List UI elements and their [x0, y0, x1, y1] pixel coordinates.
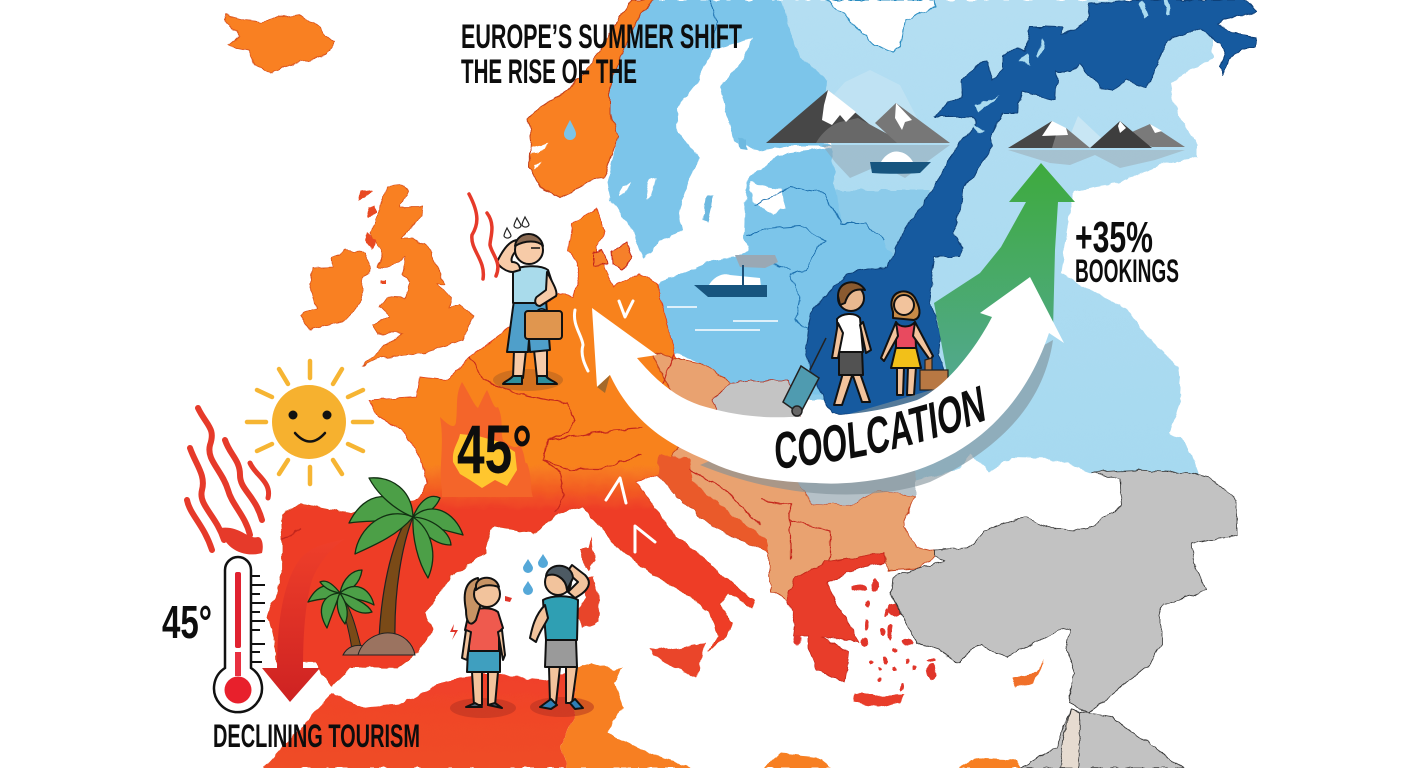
- stat: bookings up 35 percent: [1075, 213, 1179, 289]
- Ireland: [300, 250, 372, 330]
- arrow: white coolcation swoosh shadow: [700, 340, 1053, 495]
- mainland western Europe: [268, 208, 754, 687]
- Aegean islands: [793, 579, 937, 692]
- icon: flames over France: [440, 382, 533, 497]
- stat: bookings up 35 percent: +35%: [1075, 213, 1153, 262]
- Sinai, beige: [1060, 710, 1080, 768]
- map of Europe: [225, 0, 1257, 768]
- icon: mountains with lake, east: [1008, 116, 1185, 168]
- North Africa, orange: [560, 663, 693, 768]
- arctic island: [827, 0, 935, 52]
- blue country borders: [710, 0, 883, 330]
- man in white shirt: [832, 282, 871, 405]
- sweat drops: [523, 554, 548, 595]
- title: Europe's summer shift: [461, 18, 742, 91]
- Middle East, grey: [1021, 710, 1183, 768]
- Great Britain: [362, 185, 473, 367]
- North Africa, red: [263, 668, 577, 768]
- North Africa, eastern coast pieces: [763, 753, 1021, 768]
- icon: small ship: [870, 152, 931, 174]
- arrow: white coolcation swoosh: [592, 277, 1064, 484]
- icon: smiling sun: [247, 361, 372, 484]
- suitcase: blue: [783, 338, 826, 416]
- fjord inlets: [968, 0, 1171, 133]
- icon: water drop: [564, 120, 576, 140]
- title: Europe's summer shift: EUROPE’S SUMMER SHIFT: [461, 18, 742, 56]
- title: Europe's summer shift: THE RISE OF THE: [461, 53, 637, 91]
- icon: small palm tree: [308, 570, 374, 650]
- Greece: [786, 552, 885, 683]
- Hebrides islands: [358, 190, 386, 284]
- icon: large palm tree: [349, 478, 463, 640]
- grey-blue area under the arrow: [790, 470, 915, 505]
- stat: bookings up 35 percent: BOOKINGS: [1075, 253, 1179, 289]
- Iceland: [225, 14, 335, 72]
- icon: heat waves: [187, 408, 269, 554]
- Corsica: [580, 537, 595, 570]
- Croatian coast, red: [657, 455, 768, 553]
- icon: thermometer: [214, 557, 265, 712]
- man in teal shirt: [530, 565, 589, 709]
- icon: mountains with lake, west: [766, 70, 950, 178]
- value: 45 degrees over France: 45°: [457, 411, 532, 488]
- Cyprus: [1012, 660, 1045, 688]
- Baltic lake: [750, 182, 785, 215]
- region: dark blue Scandinavian band: [805, 0, 1257, 420]
- grey region above the arrow: [712, 380, 800, 420]
- Sicily: [650, 643, 705, 678]
- Turkey and Caucasus, grey: [890, 470, 1237, 713]
- Swedish lakes and Gotland: [702, 137, 746, 222]
- woman in red top: [881, 291, 933, 395]
- people: couple with suitcases: [783, 282, 948, 416]
- country borders in red: [283, 353, 830, 563]
- region: Russia, light blue: [775, 0, 1225, 487]
- woman in red shirt: [462, 578, 505, 708]
- region: Belarus and surrounds, soft blue: [790, 190, 930, 400]
- Sardinia: [577, 575, 600, 628]
- label: coolcation: COOLCATION: [776, 386, 985, 468]
- fjord marks: [531, 143, 550, 170]
- person: hot tourist with bag: [493, 217, 563, 391]
- white heat marks and chevrons: [574, 301, 655, 552]
- arrow: green rising bookings: [934, 163, 1075, 390]
- Balkans, tan: [652, 353, 935, 600]
- icon: ferry ship: [667, 255, 778, 330]
- region: Baltics and Poland, mid blue: [658, 147, 900, 395]
- icon: sand mounds: [343, 633, 415, 655]
- Norway, orange: [528, 0, 653, 198]
- Crete: [853, 693, 905, 707]
- label: declining tourism: DECLINING TOURISM: [213, 718, 420, 754]
- suitcase: brown: [920, 358, 948, 390]
- arrow: declining tourism: [262, 539, 345, 702]
- Denmark islands: [594, 243, 632, 270]
- region: Sweden and Finland, mid blue: [607, 0, 832, 257]
- icon: red heat squiggles: [469, 194, 498, 279]
- people: overheated couple: [450, 554, 594, 718]
- heat marks: [450, 596, 512, 640]
- value: 45 degrees by thermometer: 45°: [162, 596, 212, 648]
- arrowhead shadow: [597, 375, 610, 393]
